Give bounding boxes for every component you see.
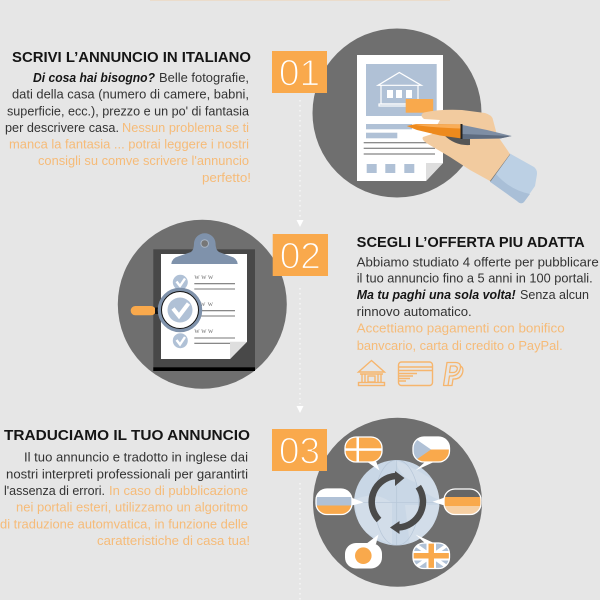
text block: step 1: consigli su comve scrivere l'annuncio <box>38 153 249 168</box>
text block: step 3: caratteristiche di casa tua! <box>97 533 250 548</box>
illustration: clipboard and magnifier: www <box>194 326 214 335</box>
text block: step 3: nostri interpreti professionali per garantirti <box>6 466 248 481</box>
text block: step 1: per descrivere casa. <box>5 120 119 135</box>
number badge 02: 02 <box>280 236 321 276</box>
flag bubble: Germany <box>444 489 481 515</box>
arrow: step 1 to 2 <box>296 220 304 227</box>
flag bubble: UK <box>413 543 450 569</box>
icon: bank <box>358 360 384 386</box>
refresh arrows <box>372 471 423 534</box>
illustration: document and hand <box>312 28 537 203</box>
text block: step 2: Senza alcun <box>520 287 589 302</box>
heading: step 1: SCRIVI L’ANNUNCIO IN ITALIANO <box>12 50 251 66</box>
icon: credit card <box>398 362 432 386</box>
text block: step 3: l'assenza di errori. <box>4 483 105 498</box>
text block: step 1: Di cosa hai bisogno? <box>33 70 155 85</box>
text block: step 1: manca la fantasia ... potrai leggere i nostri <box>9 136 249 152</box>
sleeve <box>490 153 537 203</box>
number badge 03: 03 <box>279 430 320 472</box>
heading: step 2: SCEGLI L’OFFERTA PIU ADATTA <box>357 235 585 251</box>
text block: step 3 <box>0 450 250 548</box>
text block: step 2: il tuo annuncio fino a 5 anni in 100 portali. <box>357 271 593 286</box>
illustration: clipboard and magnifier: www <box>194 272 214 281</box>
text block: step 1: Nessun problema se ti <box>122 120 249 135</box>
text block: step 2: banvcario, carta di credito o PayPal. <box>357 338 563 353</box>
text block: step 1: dati della casa (numero di camere, babni, <box>12 87 249 102</box>
illustration: globe with language bubbles <box>313 418 482 587</box>
flag bubble: Czech <box>413 437 450 462</box>
text block: step 2 <box>357 255 599 353</box>
illustration: clipboard and magnifier: ww <box>200 299 214 308</box>
heading: step 3: TRADUCIAMO IL TUO ANNUNCIO <box>4 428 250 444</box>
arrow: step 2 to 3 <box>296 406 304 413</box>
icon: PayPal <box>444 362 463 386</box>
flag bubble: Russia <box>316 489 352 514</box>
text block: step 1: perfetto! <box>202 170 251 185</box>
text block: step 3: In caso di pubblicazione <box>109 483 248 498</box>
text block: step 2: Accettiamo pagamenti con bonifico <box>357 321 565 336</box>
text block: step 1: Belle fotografie, <box>159 70 249 85</box>
pen <box>407 124 462 138</box>
text block: step 2: Ma tu paghi una sola volta! <box>357 287 516 302</box>
flag bubble: Denmark <box>345 437 382 462</box>
bubble tails <box>350 461 446 544</box>
text block: step 2: rinnovo automatico. <box>357 304 472 319</box>
text block: step 1: superficie, ecc.), prezzo e un po' di fantasia <box>7 103 250 118</box>
text block: step 2: Abbiamo studiato 4 offerte per pubblicare <box>357 255 599 270</box>
illustration: clipboard and magnifier <box>118 220 287 389</box>
text block: step 3: Il tuo annuncio e tradotto in inglese dai <box>24 450 248 465</box>
text block: step 1 <box>5 70 251 185</box>
text block: step 3: di traduzione automvatica, in funzione delle <box>0 516 248 531</box>
text block: step 3: nei portali esteri, utilizzamo un algoritmo <box>16 500 248 515</box>
flag bubble: Japan <box>345 543 382 568</box>
number badge 01: 01 <box>279 52 320 94</box>
hand <box>422 110 510 181</box>
